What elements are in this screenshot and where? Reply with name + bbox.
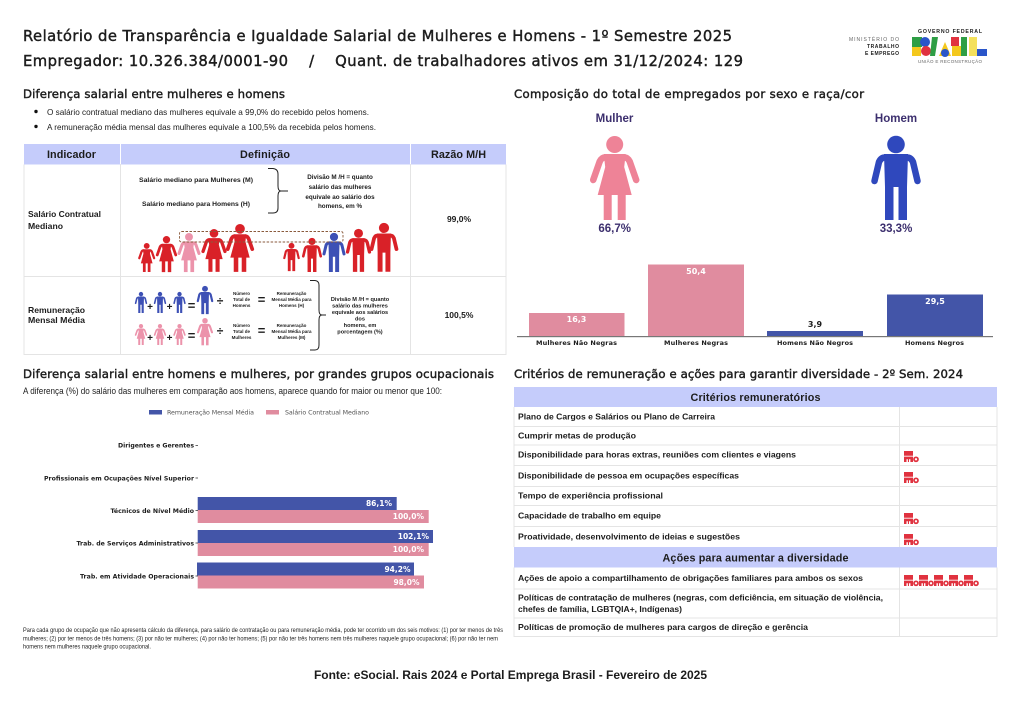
legend: Remuneração Mensal Média: [167, 408, 254, 416]
row: salário contratual mediano: salário das mulheres: [309, 184, 372, 191]
row: remuneração mensal média: +: [147, 333, 153, 344]
row: remuneração mensal média: =: [188, 298, 196, 313]
title: Empregador: 10.326.384/0001-90 / Quant. de trabalhadores ativos em 31/12/2024: 129: [23, 53, 743, 70]
row: remuneração mensal média: Remuneração: [277, 291, 307, 296]
bullets: [34, 107, 376, 132]
row: remuneração mensal média: =: [258, 323, 266, 338]
row: remuneração mensal média: Homens: [233, 303, 251, 308]
bar chart: composição por raça/cor: 16,3: [567, 315, 586, 324]
logo: ministério e governo federal: E EMPREGO: [865, 51, 899, 57]
bar chart: grupos ocupacionais: 86,1%: [366, 499, 392, 508]
panel: critérios e ações: Políticas de contratação de mulheres (negras, com deficiência, em situação de violência,: [518, 592, 883, 602]
panel: critérios e ações: Disponibilidade para horas extras, reuniões com clientes e viagens: [518, 450, 796, 460]
panel: critérios e ações: Políticas de promoção de mulheres para cargos de direção e gerência: [518, 622, 808, 632]
table header: Indicador: [47, 149, 97, 161]
row: salário contratual mediano: homens, em %: [318, 203, 362, 210]
source: Fonte: eSocial. Rais 2024 e Portal Emprega Brasil - Fevereiro de 2025: [314, 668, 707, 682]
row: salário contratual mediano: Mediano: [28, 221, 63, 231]
logo: ministério e governo federal: [849, 29, 987, 64]
icons: critérios marcados: [904, 451, 978, 586]
row: salário contratual mediano: Salário Contratual: [28, 209, 101, 219]
bar chart: grupos ocupacionais: 100,0%: [393, 512, 424, 521]
footnote: [23, 628, 503, 650]
row: remuneração mensal média: Número: [233, 323, 250, 328]
bar chart: composição por raça/cor: [517, 264, 993, 347]
value: 100,5%: 100,5%: [445, 310, 474, 320]
row: salário contratual mediano: [28, 168, 396, 272]
row: remuneração mensal média: ÷: [217, 324, 224, 338]
row: remuneração mensal média: +: [167, 333, 173, 344]
logo: ministério e governo federal: TRABALHO: [867, 44, 899, 50]
panel: critérios e ações: Disponibilidade de pessoa em ocupações específicas: [518, 470, 739, 480]
panel: critérios e ações: Proatividade, desenvolvimento de ideias e sugestões: [518, 532, 740, 542]
row: remuneração mensal média: equivale aos salários: [332, 310, 388, 316]
row: remuneração mensal média: [28, 280, 390, 350]
bar chart: grupos ocupacionais: 100,0%: [393, 545, 424, 554]
row: remuneração mensal média: Total de: [233, 329, 250, 334]
legend: Salário Contratual Mediano: [285, 408, 369, 416]
bar chart: composição por raça/cor: Homens Negros: [905, 339, 964, 347]
panel: critérios e ações: Tempo de experiência profissional: [518, 490, 663, 500]
row: remuneração mensal média: Mulheres (M): [278, 335, 306, 340]
panel: critérios e ações: Capacidade de trabalho em equipe: [518, 510, 661, 520]
row: salário contratual mediano: Salário mediano para Homens (H): [142, 201, 250, 208]
icon: homem: [874, 136, 918, 220]
panel: critérios e ações: Cumprir metas de produção: [518, 430, 636, 440]
subtitle: A diferença (%) do salário das mulheres em comparação aos homens, aparece quando for maior ou menor que 100:: [23, 386, 442, 396]
heading: composição: Composição do total de empregados por sexo e raça/cor: [514, 87, 864, 101]
title: [23, 28, 743, 70]
title: Relatório de Transparência e Igualdade Salarial de Mulheres e Homens - 1º Semestre 2025: [23, 28, 732, 45]
value: 99,0%: 99,0%: [447, 214, 471, 224]
panel: critérios e ações: [514, 387, 997, 637]
row: remuneração mensal média: Número: [233, 291, 250, 296]
bar chart: grupos ocupacionais: 94,2%: [384, 565, 411, 574]
table header: Definição: [240, 149, 290, 161]
panel: critérios e ações: Plano de Cargos e Salários ou Plano de Carreira: [518, 412, 715, 422]
row: remuneração mensal média: ÷: [217, 294, 224, 308]
bar chart: grupos ocupacionais: Profissionais em Ocupações Nível Superior: [44, 474, 195, 482]
heading: critérios: Critérios de remuneração e ações para garantir diversidade - 2º Sem. 2024: [514, 367, 963, 381]
footnote: homens nem mulheres naquele grupo ocupacional.: [23, 644, 151, 650]
panel: critérios e ações: Ações de apoio a compartilhamento de obrigações familiares para ambos os sexos: [518, 573, 863, 583]
panel: homem: 33,3%: [880, 223, 912, 235]
row: salário contratual mediano: Divisão M /H = quanto: [307, 174, 373, 181]
bullets: O salário contratual mediano das mulheres equivale a 99,0% do recebido pelos homens.: [47, 107, 369, 117]
panel: critérios e ações: chefes de família, LGBTQIA+, Indígenas): [518, 604, 682, 614]
row: remuneração mensal média: Mensal Média para: [271, 329, 312, 334]
logo: ministério e governo federal: MINISTÉRIO DO: [849, 36, 899, 43]
row: remuneração mensal média: Remuneração: [277, 323, 307, 328]
table header: [24, 144, 506, 164]
row: remuneração mensal média: Mulheres: [232, 335, 252, 340]
footnote: mulheres; (2) por ter menos de três homens; (3) por não ter mulheres; (4) por não ter homens; (5) por não ter três homens nem três mulheres naquele grupo ocupacional; (6) por não ter nem: [23, 636, 498, 642]
heading: diferença salarial: Diferença salarial entre mulheres e homens: [23, 87, 285, 101]
bar chart: composição por raça/cor: Homens Não Negros: [777, 339, 853, 347]
legend: [149, 408, 369, 416]
panel: homem: Homem: [875, 113, 917, 125]
row: remuneração mensal média: Mensal Média para: [271, 297, 312, 302]
row: remuneração mensal média: homens, em: [344, 323, 376, 329]
logo: ministério e governo federal: UNIÃO E RECONSTRUÇÃO: [918, 58, 982, 64]
bullets: A remuneração média mensal das mulheres equivale a 100,5% da recebida pelos homens.: [47, 122, 376, 132]
row: remuneração mensal média: =: [258, 292, 266, 307]
panel: mulher: Mulher: [596, 113, 634, 125]
bar chart: composição por raça/cor: Mulheres Não Negras: [536, 339, 617, 347]
bar chart: grupos ocupacionais: Técnicos de Nível Médio: [110, 507, 194, 515]
bar chart: composição por raça/cor: 29,5: [925, 297, 945, 306]
row: salário contratual mediano: Salário mediano para Mulheres (M): [139, 177, 253, 184]
panel: tabela de indicadores: [24, 144, 506, 354]
header: critérios remuneratórios: Critérios remuneratórios: [690, 392, 820, 404]
row: remuneração mensal média: Mensal Média: [28, 315, 85, 325]
footnote: Para cada grupo de ocupação que não apresenta cálculo da diferença, para salário de contratação ou para remuneração média, pode ter ocorrido um dos seis motivos: (1) por ter menos de três: [23, 628, 503, 634]
logo: ministério e governo federal: GOVERNO FEDERAL: [918, 29, 983, 35]
icon: mulher: [593, 136, 636, 220]
row: remuneração mensal média: dos: [355, 316, 365, 322]
row: remuneração mensal média: =: [188, 328, 196, 343]
bar chart: grupos ocupacionais: Dirigentes e Gerentes: [118, 442, 194, 450]
row: remuneração mensal média: porcentagem (%): [337, 330, 383, 336]
bar chart: grupos ocupacionais: Trab. de Serviços Administrativos: [76, 540, 194, 548]
panel: homem: [874, 113, 918, 235]
bar chart: grupos ocupacionais: 98,0%: [393, 578, 420, 587]
bar chart: grupos ocupacionais: [44, 442, 433, 588]
row: remuneração mensal média: Divisão M /H = quanto: [331, 297, 390, 303]
row: remuneração mensal média: Homens (H): [279, 303, 305, 308]
row: remuneração mensal média: Remuneração: [28, 305, 85, 315]
row: remuneração mensal média: Total de: [233, 297, 250, 302]
bar chart: composição por raça/cor: 3,9: [808, 320, 823, 329]
table header: Razão M/H: [431, 149, 486, 161]
icon: mulheres e homens ordenados: [139, 223, 396, 272]
bar chart: grupos ocupacionais: Trab. em Atividade Operacionais: [80, 574, 194, 580]
panel: mulher: [593, 113, 636, 235]
row: remuneração mensal média: +: [167, 302, 173, 313]
heading: grupos ocupacionais: Diferença salarial entre homens e mulheres, por grandes grupos ocupacionais: [23, 367, 494, 381]
row: salário contratual mediano: equivale ao salário dos: [305, 194, 375, 201]
header: ações: Ações para aumentar a diversidade: [662, 552, 848, 564]
row: remuneração mensal média: +: [147, 302, 153, 313]
bar chart: grupos ocupacionais: 102,1%: [398, 532, 429, 541]
bar chart: composição por raça/cor: Mulheres Negras: [664, 339, 728, 347]
bar chart: composição por raça/cor: 50,4: [686, 267, 706, 276]
row: remuneração mensal média: salário das mulheres: [332, 304, 388, 310]
panel: mulher: 66,7%: [598, 223, 631, 235]
